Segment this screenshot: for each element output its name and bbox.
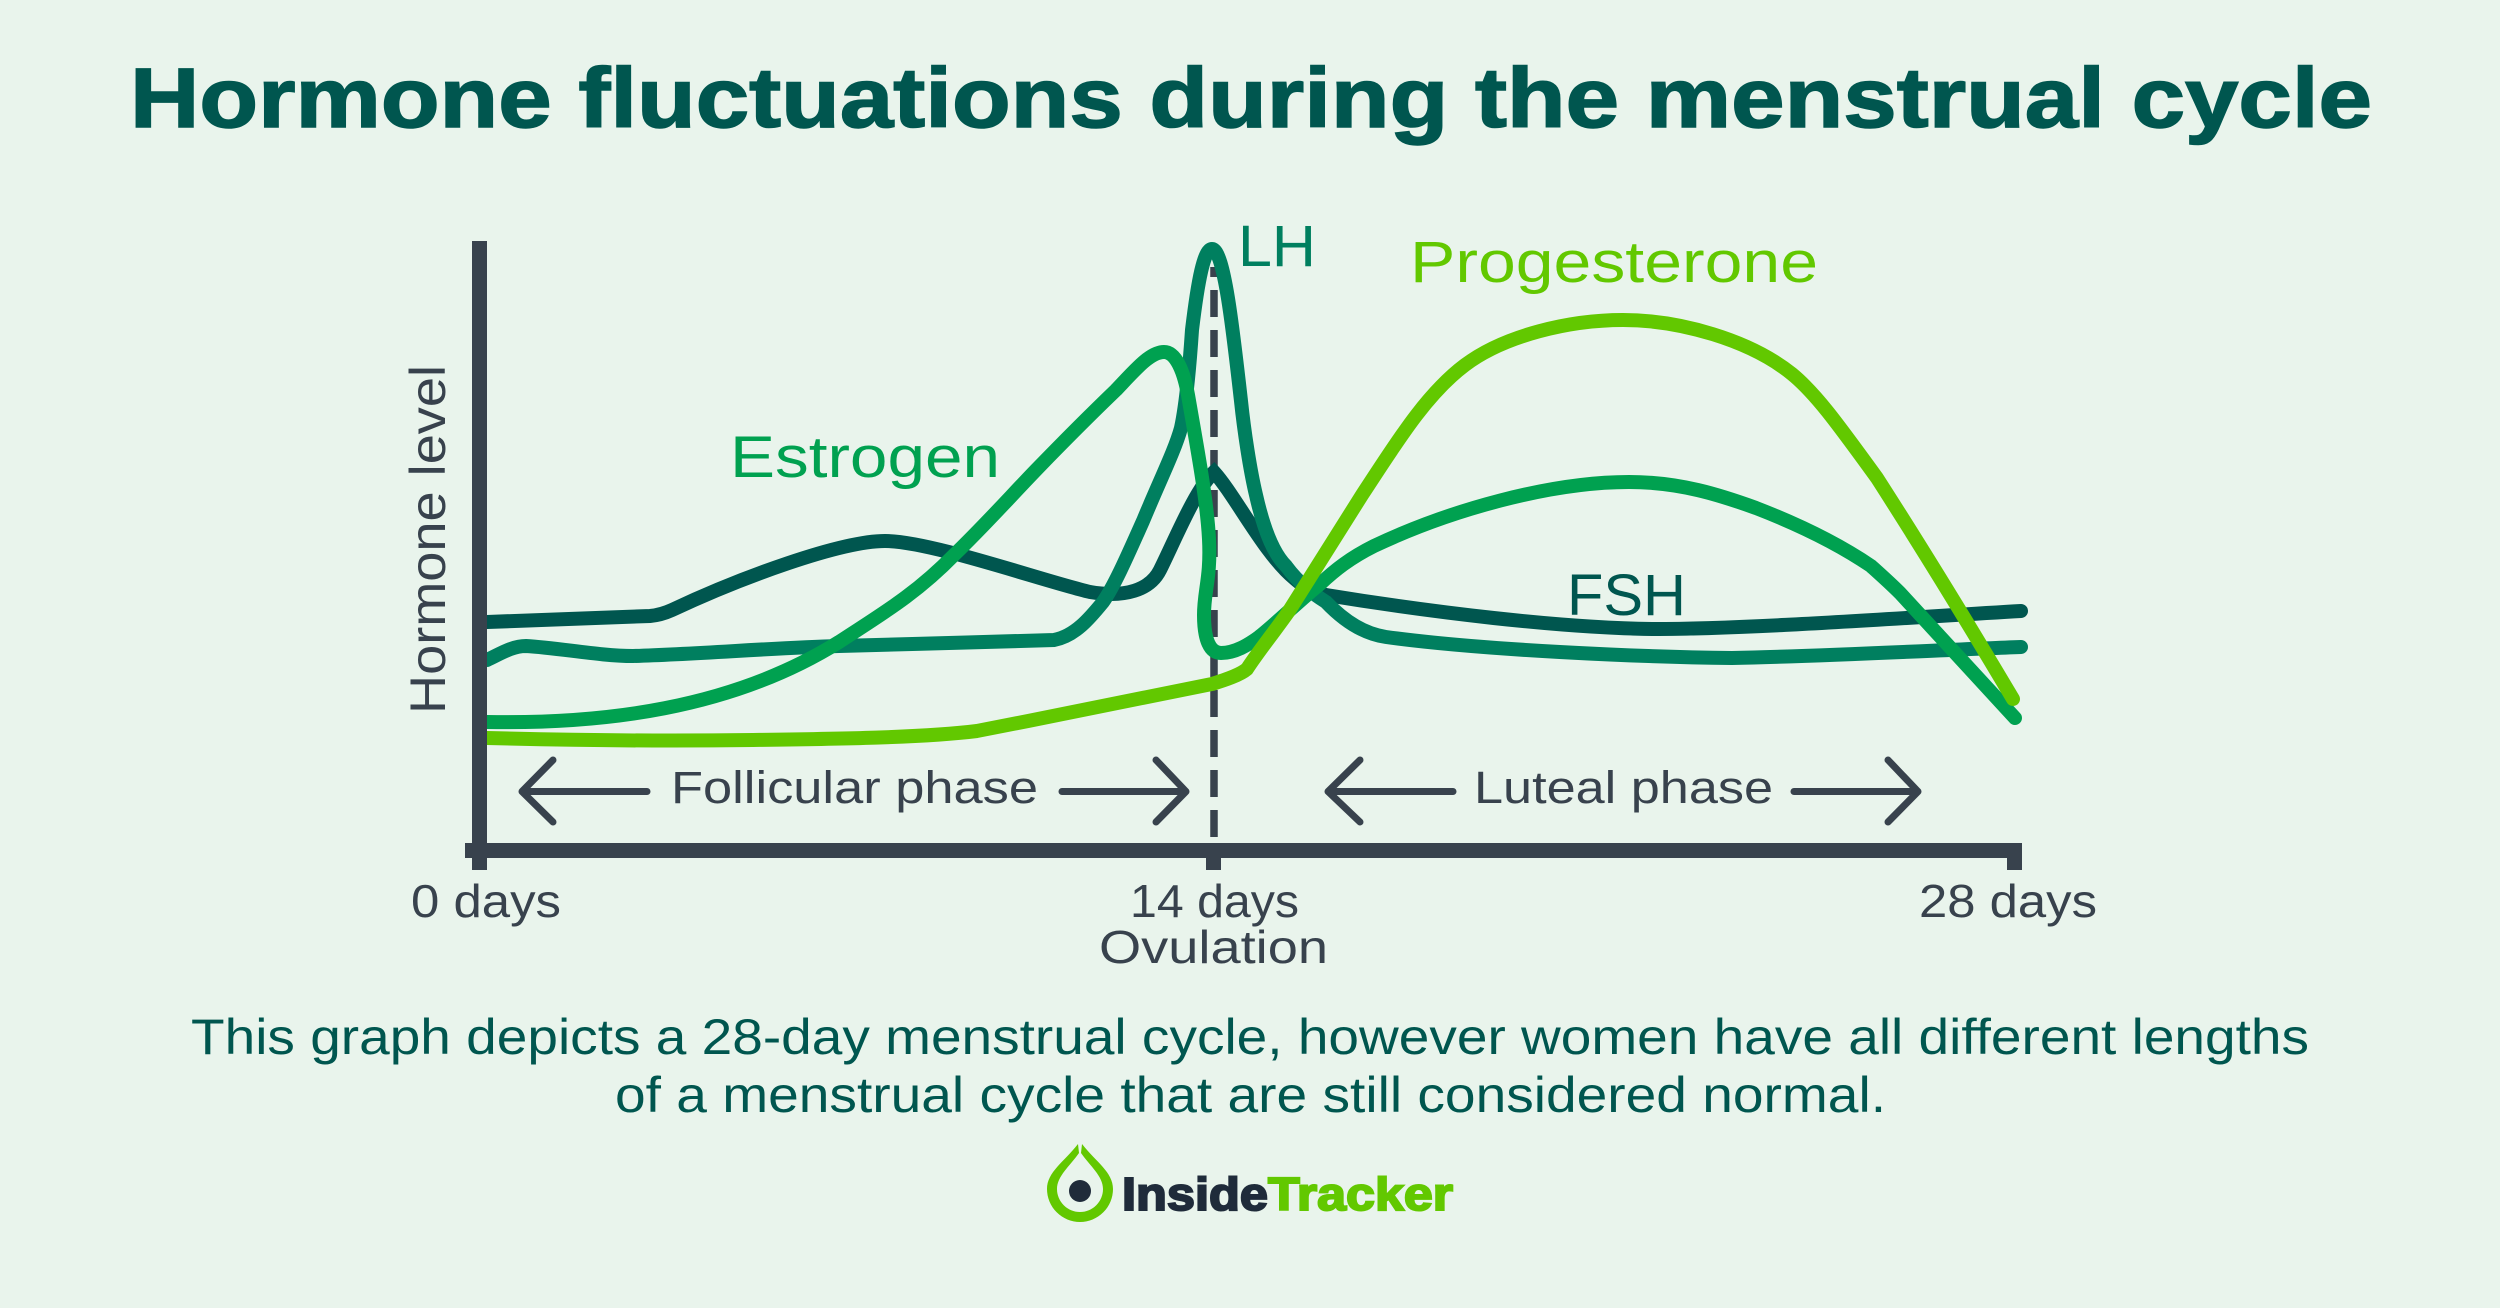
logo: InsideTracker <box>1047 1144 1453 1222</box>
arrow: follicular right <box>1062 760 1186 822</box>
luteal phase label with arrows: Luteal phase <box>1474 762 1773 813</box>
arrow: luteal left <box>1328 760 1453 822</box>
y-axis label: Hormone level <box>400 365 456 714</box>
label: estrogen: Estrogen <box>730 425 1000 490</box>
luteal phase label with arrows <box>1328 760 1918 822</box>
description text: This graph depicts a 28-day menstrual cycle, however women have all different lengths <box>191 1009 2309 1065</box>
x-axis tick labels: 0 days <box>411 875 561 927</box>
x-axis tick labels <box>411 875 2097 973</box>
chart: hormone levels <box>400 214 2097 973</box>
label: progesterone: Progesterone <box>1410 230 1818 295</box>
logo: InsideTracker: Tracker <box>1268 1168 1453 1220</box>
follicular phase label with arrows: Follicular phase <box>671 762 1038 813</box>
description text: of a menstrual cycle that are still considered normal. <box>615 1067 1886 1123</box>
curve: LH <box>487 249 2021 660</box>
ovulation dashed line <box>1210 267 1218 837</box>
axes <box>465 241 2022 870</box>
x-axis tick labels: 14 days <box>1130 875 1299 927</box>
arrow: luteal right <box>1794 760 1918 822</box>
curve: progesterone <box>487 320 2013 741</box>
arrow: follicular left <box>522 760 647 822</box>
description text <box>191 1009 2309 1123</box>
label: LH: LH <box>1238 214 1316 279</box>
wordmark: Inside <box>1122 1168 1268 1220</box>
follicular phase label with arrows <box>522 760 1186 822</box>
title: Hormone fluctuations during the menstrual cycle <box>130 51 2372 145</box>
icon: drop <box>1047 1144 1113 1222</box>
curve: estrogen <box>487 352 2015 722</box>
x-axis tick labels: 28 days <box>1919 875 2097 927</box>
curve: FSH <box>487 472 2021 629</box>
label: FSH: FSH <box>1567 563 1686 628</box>
x-axis tick labels: Ovulation <box>1099 921 1328 973</box>
